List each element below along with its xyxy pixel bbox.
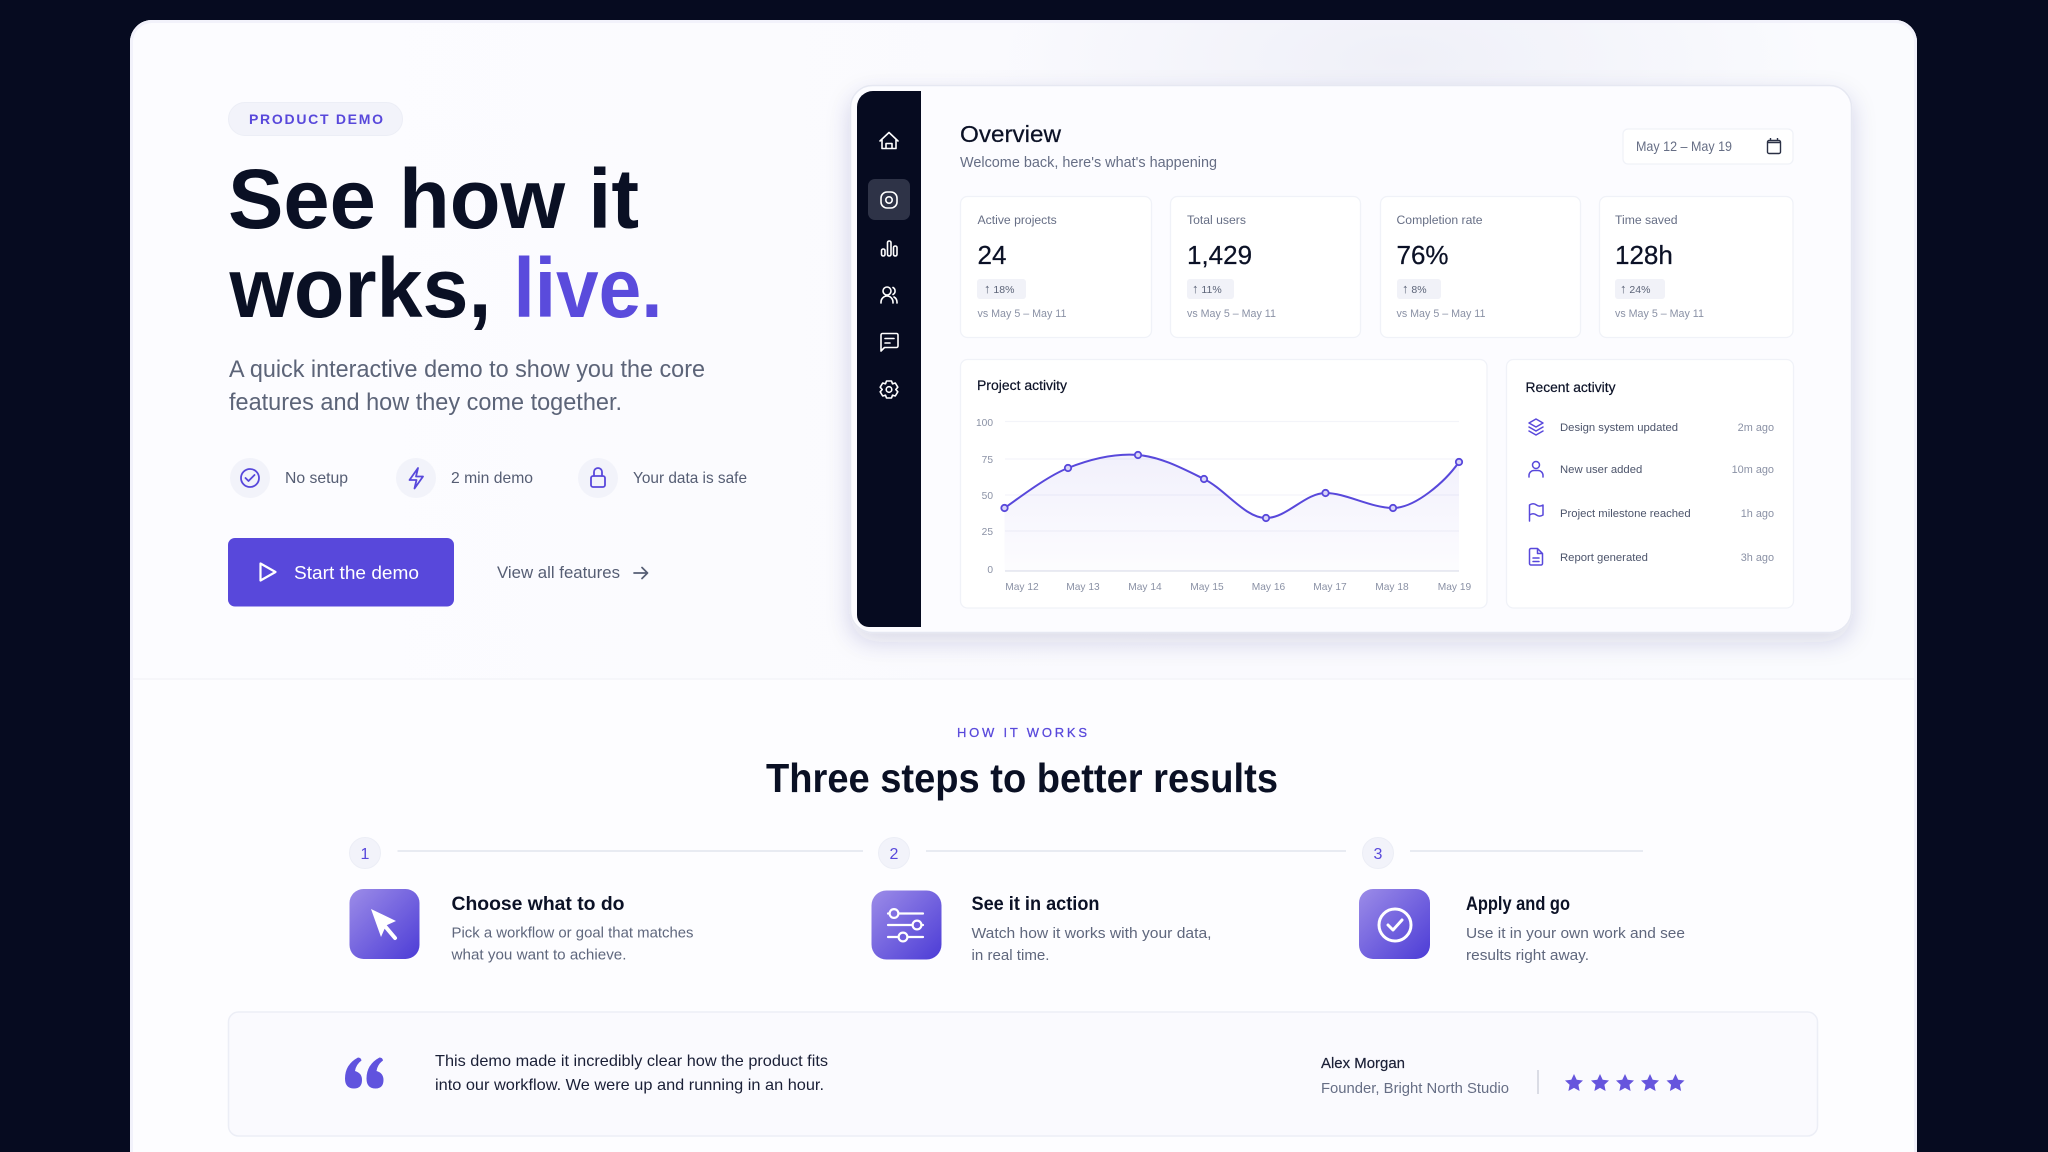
activity: new user added: New user added xyxy=(1560,464,1642,476)
stat card: time saved: 128h xyxy=(1615,240,1673,270)
dashboard heading: Overview xyxy=(960,121,1061,147)
panel: dashboard window xyxy=(850,86,1852,632)
button: start the demo xyxy=(228,538,454,606)
icon: users xyxy=(881,287,897,303)
y axis labels: 25 xyxy=(982,527,993,538)
step 3: apply and go xyxy=(1359,889,1685,964)
stat card: completion rate: Completion rate xyxy=(1396,213,1483,227)
x axis labels xyxy=(1005,582,1472,593)
testimonial author xyxy=(1321,1055,1509,1097)
x axis labels: May 13 xyxy=(1066,582,1100,593)
active nav highlight xyxy=(868,179,910,220)
activity: report generated: Report generated xyxy=(1560,552,1648,564)
feature: your data is safe xyxy=(578,458,747,498)
icon: check tile xyxy=(1359,889,1430,959)
stat card: active projects: vs May 5 – May 11 xyxy=(978,308,1066,320)
section heading: Three steps to better results xyxy=(766,755,1278,801)
title: works, xyxy=(229,241,492,335)
activity: design system updated xyxy=(1529,419,1774,435)
stat card: total users: 1,429 xyxy=(1187,240,1252,270)
activity: design system updated: 2m ago xyxy=(1738,422,1774,434)
date range picker xyxy=(1623,129,1793,164)
dashboard heading: Welcome back, here's what's happening xyxy=(960,154,1217,171)
stat card: completion rate: ↑ 8% xyxy=(1402,281,1427,296)
testimonial author: Alex Morgan xyxy=(1321,1055,1405,1072)
panel: project activity chart: Project activity xyxy=(977,378,1067,393)
step 1: choose what to do: Pick a workflow or goal that matches xyxy=(452,925,694,942)
intro paragraph xyxy=(229,356,705,416)
y axis labels: 50 xyxy=(982,491,993,502)
stat card: completion rate xyxy=(1380,196,1580,338)
activity: design system updated: Design system updated xyxy=(1560,422,1678,434)
stat card: total users: Total users xyxy=(1187,213,1246,227)
icon: quote mark xyxy=(345,1058,384,1088)
icon: home xyxy=(880,132,898,148)
panel: recent activity xyxy=(1506,360,1794,608)
stat card: active projects: Active projects xyxy=(978,213,1057,227)
activity line xyxy=(1004,455,1459,518)
icon: overview target xyxy=(881,192,897,208)
icon: sliders tile xyxy=(872,890,942,960)
testimonial author: Founder, Bright North Studio xyxy=(1321,1080,1509,1097)
testimonial quote: This demo made it incredibly clear how the product fits xyxy=(435,1053,828,1070)
dashboard sidebar xyxy=(857,91,921,627)
stat card: active projects xyxy=(960,196,1152,338)
intro paragraph: A quick interactive demo to show you the core xyxy=(229,356,705,383)
activity: project milestone reached: 1h ago xyxy=(1741,508,1774,520)
stat card: total users xyxy=(1170,196,1360,338)
stat card: active projects: ↑ 18% xyxy=(984,281,1014,296)
rating stars xyxy=(1565,1074,1684,1091)
activity: new user added: 10m ago xyxy=(1732,464,1774,476)
activity: new user added xyxy=(1529,462,1774,477)
step 3: apply and go: Use it in your own work and see xyxy=(1466,925,1685,942)
stat card: completion rate: vs May 5 – May 11 xyxy=(1396,308,1485,320)
x axis labels: May 17 xyxy=(1313,582,1347,593)
step 3: apply and go: Apply and go xyxy=(1466,894,1570,915)
area under line xyxy=(1004,455,1459,571)
panel: project activity chart xyxy=(960,360,1487,608)
activity: report generated: 3h ago xyxy=(1741,552,1774,564)
date range picker: May 12 – May 19 xyxy=(1636,138,1732,154)
stat card: time saved: vs May 5 – May 11 xyxy=(1615,308,1704,320)
stat card: active projects: 24 xyxy=(978,240,1006,270)
x axis labels: May 14 xyxy=(1128,582,1162,593)
panel: testimonial xyxy=(228,1012,1818,1136)
title: live. xyxy=(514,241,662,335)
x axis labels: May 18 xyxy=(1375,582,1409,593)
panel: recent activity: Recent activity xyxy=(1526,380,1616,395)
data points xyxy=(1001,452,1462,521)
step number 3: 3 xyxy=(1374,846,1383,863)
x axis labels: May 12 xyxy=(1005,582,1039,593)
icon: messages xyxy=(881,334,898,351)
feature: no setup: No setup xyxy=(285,470,348,487)
step number 1: 1 xyxy=(361,846,370,863)
y axis labels: 0 xyxy=(987,565,993,576)
title: See how it xyxy=(228,152,639,246)
stat card: total users: ↑ 11% xyxy=(1192,281,1222,296)
feature: 2 min demo xyxy=(396,458,533,498)
link: view all features: View all features xyxy=(497,563,620,582)
step 3: apply and go: results right away. xyxy=(1466,947,1589,964)
y axis labels: 75 xyxy=(982,455,993,466)
testimonial quote xyxy=(435,1053,828,1094)
feature: no setup xyxy=(230,458,348,498)
step number 2 xyxy=(878,838,910,868)
badge: product demo xyxy=(228,102,402,136)
x axis labels: May 19 xyxy=(1438,582,1472,593)
badge: product demo: PRODUCT DEMO xyxy=(249,111,383,127)
step 1: choose what to do xyxy=(350,889,694,964)
y axis labels: 100 xyxy=(976,418,993,429)
stat card: total users: vs May 5 – May 11 xyxy=(1187,308,1276,320)
feature: your data is safe: Your data is safe xyxy=(633,470,747,487)
stat card: completion rate: 76% xyxy=(1396,240,1449,270)
stat card: time saved: ↑ 24% xyxy=(1620,281,1650,296)
x axis labels: May 15 xyxy=(1190,582,1224,593)
step 2: see it in action: See it in action xyxy=(972,894,1100,915)
icon: bar chart xyxy=(882,241,897,256)
feature: 2 min demo: 2 min demo xyxy=(451,470,533,487)
activity: report generated xyxy=(1530,548,1774,565)
step 1: choose what to do: what you want to achieve. xyxy=(450,947,626,964)
icon: settings gear xyxy=(880,381,898,398)
activity: project milestone reached: Project milestone reached xyxy=(1560,508,1691,520)
testimonial quote: into our workflow. We were up and running in an hour. xyxy=(435,1077,824,1094)
step 2: see it in action xyxy=(872,890,1212,964)
step number 2: 2 xyxy=(890,846,899,863)
step number 3 xyxy=(1362,838,1394,868)
button: start the demo: Start the demo xyxy=(294,563,419,583)
section eyebrow: how it works: HOW IT WORKS xyxy=(957,725,1087,740)
stat card: time saved: Time saved xyxy=(1615,213,1678,227)
step 2: see it in action: in real time. xyxy=(972,947,1050,964)
stat card: time saved xyxy=(1600,196,1793,338)
step 2: see it in action: Watch how it works with your data, xyxy=(972,925,1212,942)
activity: project milestone reached xyxy=(1530,504,1774,521)
step number 1 xyxy=(350,838,380,868)
icon: cursor tile xyxy=(350,889,420,959)
intro paragraph: features and how they come together. xyxy=(229,389,622,416)
y axis labels xyxy=(976,418,993,576)
x axis labels: May 16 xyxy=(1252,582,1286,593)
title xyxy=(228,152,662,335)
step timeline xyxy=(350,838,1643,868)
step 1: choose what to do: Choose what to do xyxy=(452,894,624,915)
dashboard heading xyxy=(960,121,1217,171)
